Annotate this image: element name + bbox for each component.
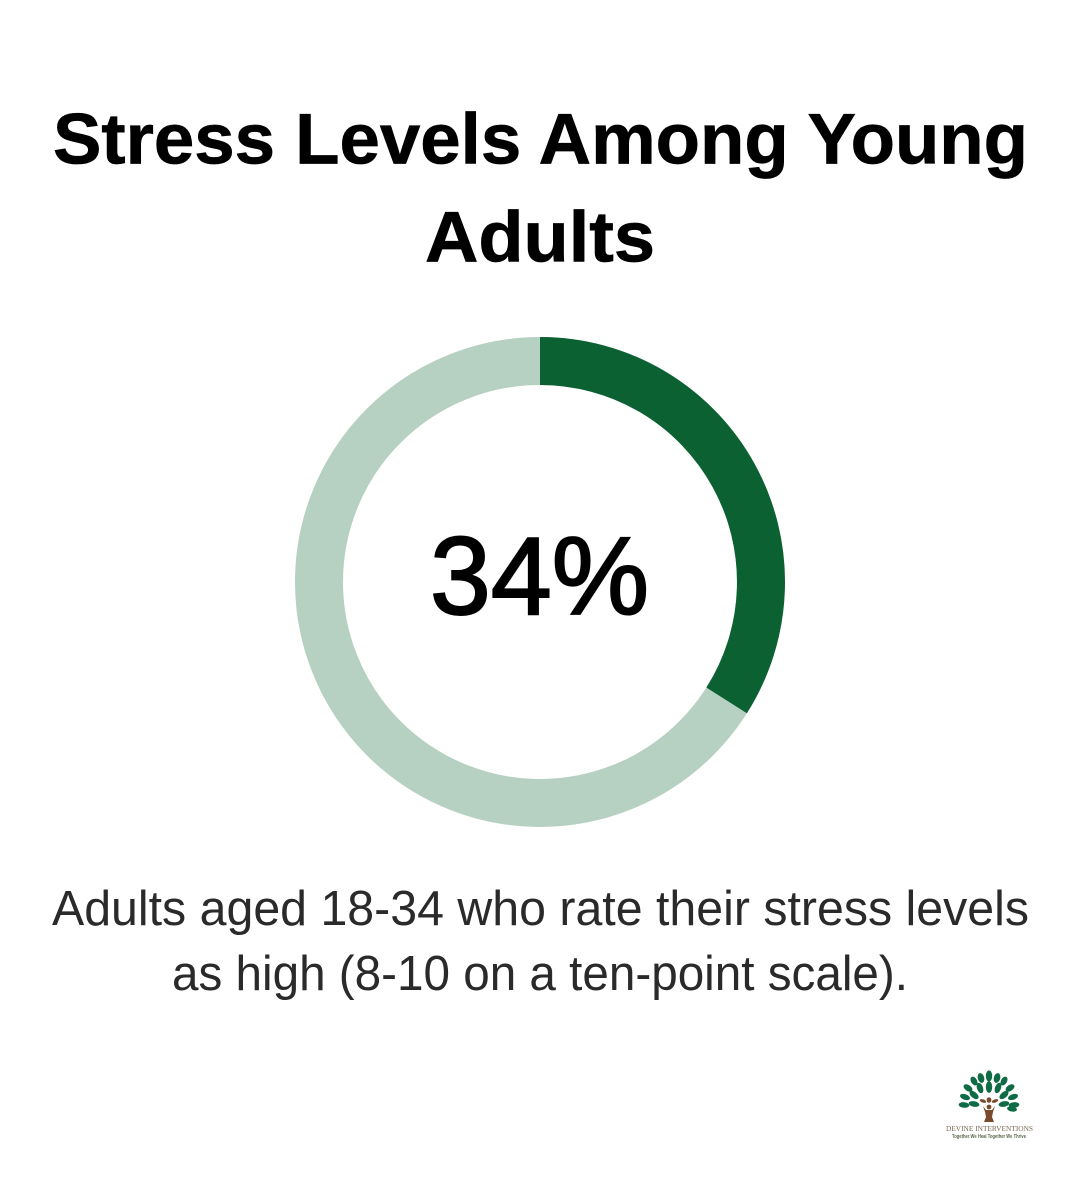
donut chart: 34% bbox=[319, 361, 761, 803]
icon: tree trunk figure bbox=[979, 1097, 999, 1122]
logo name: DEVINE INTERVENTIONS bbox=[946, 1125, 1033, 1133]
title: Adults bbox=[425, 198, 655, 278]
description text bbox=[52, 882, 1029, 1001]
logo: Devine Interventions bbox=[946, 1070, 1033, 1140]
icon: tree leaves bbox=[958, 1070, 1020, 1112]
logo tagline: Together We Heal Together We Thrive bbox=[952, 1134, 1026, 1140]
title: Stress Levels Among Young bbox=[53, 100, 1028, 180]
description text: Adults aged 18-34 who rate their stress levels bbox=[52, 882, 1029, 936]
donut value segment bbox=[540, 361, 761, 700]
description text: as high (8-10 on a ten-point scale). bbox=[172, 947, 908, 1001]
percentage value: 34% bbox=[430, 515, 649, 638]
title bbox=[53, 100, 1028, 278]
donut track bbox=[319, 361, 761, 803]
